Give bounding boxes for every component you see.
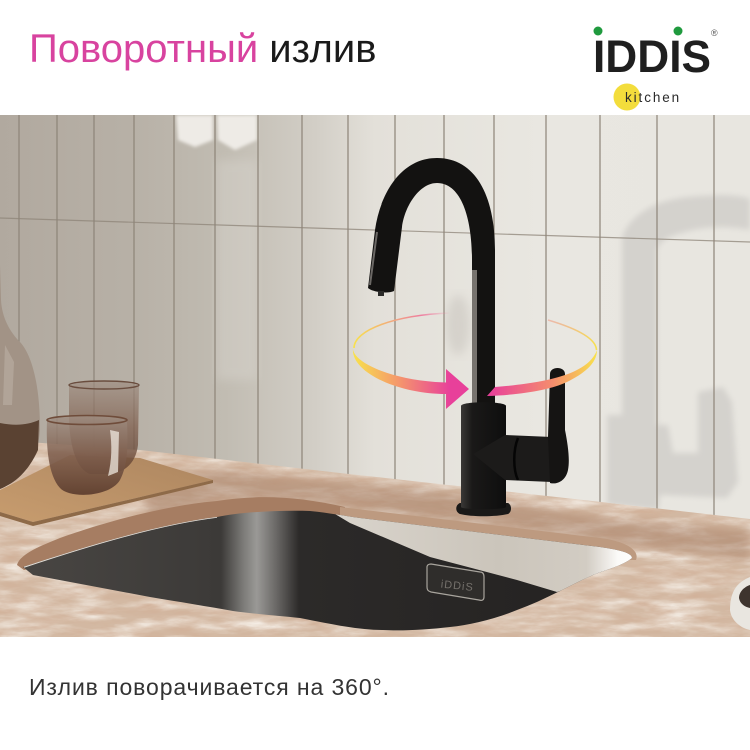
darker stone behind sink — [140, 470, 750, 560]
logo wordmark: IDDIS — [593, 31, 711, 82]
yellow circle — [614, 84, 640, 110]
kitchen wordmark: kitchen — [625, 90, 681, 105]
arrow upper arc left — [354, 313, 450, 348]
logo: IDDIS kitchen — [593, 26, 718, 110]
faucet spout and riser — [368, 158, 495, 410]
glass vase — [0, 265, 40, 489]
handle collar — [514, 438, 518, 480]
sink rim right — [340, 507, 637, 560]
cutting board edge — [0, 480, 213, 526]
sink basin — [23, 510, 632, 630]
sink rim highlight — [24, 517, 217, 567]
logo green dot left — [594, 26, 602, 36]
faucet lever — [548, 368, 569, 483]
riser highlight — [472, 270, 477, 404]
wall glossy streak — [218, 162, 252, 378]
arrow upper arc right — [548, 320, 596, 350]
tiled wall — [0, 115, 750, 525]
tile joints — [0, 115, 750, 520]
faucet base — [461, 402, 506, 509]
faucet foot — [456, 503, 511, 516]
wall reflection highlights — [176, 115, 257, 150]
logo green dot right — [674, 26, 682, 36]
sink back edge shadow — [594, 546, 600, 547]
countertop — [0, 430, 750, 637]
sink rim left — [17, 497, 345, 570]
shadow behind riser — [446, 295, 470, 355]
registered mark: ® — [711, 28, 718, 38]
faucet — [368, 158, 569, 516]
cutting board — [0, 455, 213, 522]
arrow lower right band — [487, 350, 597, 396]
back glass — [69, 381, 139, 474]
faucet handle body — [489, 435, 550, 482]
title: Поворотный излив — [29, 27, 376, 71]
front glass — [47, 415, 127, 495]
white cup on counter — [730, 577, 750, 630]
caption: Излив поворачивается на 360°. — [29, 674, 390, 700]
arrow lower left band with head — [353, 348, 469, 409]
spout tip — [378, 291, 384, 296]
faucet shadow on wall — [607, 195, 750, 510]
sink lit wall — [335, 514, 632, 592]
spout highlight — [370, 232, 377, 285]
plate text: iDDiS — [440, 579, 474, 594]
rotation arrow — [353, 313, 597, 409]
photo: kitchen sink with faucet — [0, 115, 750, 640]
sink brand plate — [427, 564, 484, 600]
